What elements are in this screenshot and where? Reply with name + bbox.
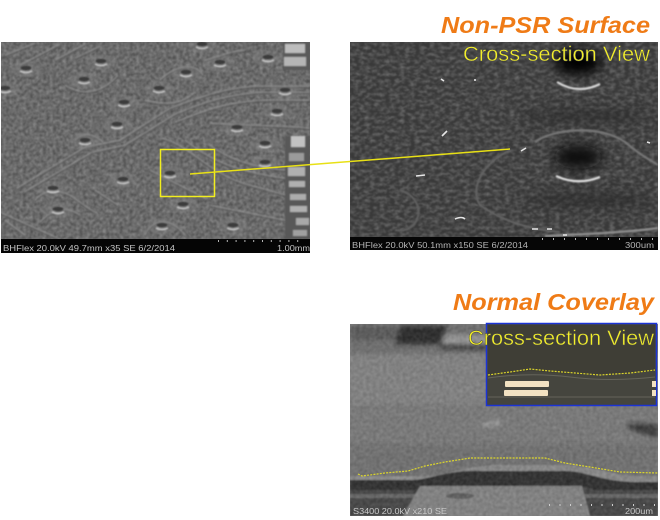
coverlay outline, dotted [358, 458, 658, 476]
scale bar caption [1, 239, 310, 253]
scale bar caption: BHFlex 20.0kV 49.7mm x35 SE 6/2/2014 [3, 243, 175, 253]
scale bar caption: 300um [625, 241, 654, 250]
scale caption: S3400 20.0kV x210 SE [353, 507, 448, 516]
layered tonal bands [350, 324, 658, 476]
scale bar caption: BHFlex 20.0kV 50.1mm x150 SE 6/2/2014 [352, 241, 529, 250]
substrate ridge at bottom [350, 465, 658, 516]
inset dark upper layer [488, 325, 655, 375]
panel: surface overview micrograph [0, 37, 310, 253]
label: cross-section view, coverlay: Cross-section View [468, 327, 655, 350]
panel: coverlay section micrograph [350, 324, 658, 516]
inset copper traces [504, 381, 656, 396]
label: cross-section view, surface: Cross-section View [463, 43, 651, 66]
heading: Normal Coverlay: Normal Coverlay [453, 289, 655, 315]
inset lower layer [488, 371, 655, 404]
debris specks [416, 79, 650, 235]
heading: Non-PSR Surface: Non-PSR Surface [441, 12, 650, 38]
panel: surface magnified micrograph [350, 42, 658, 250]
callout box on overview [160, 150, 214, 196]
scale caption [353, 505, 655, 516]
scale bar caption: 1.00mm [277, 243, 310, 253]
dimple shadows and rims [395, 49, 658, 236]
circuit traces on the surface [0, 43, 310, 241]
scale caption: 200um [625, 507, 653, 516]
arrow: connector line to magnified view [190, 149, 510, 174]
scale bar caption [350, 237, 658, 250]
inset film lines [488, 375, 655, 397]
inset coverlay outline, dotted [488, 369, 655, 375]
inset: optical cross-section [486, 324, 656, 406]
dimples [0, 37, 300, 234]
connector pads [283, 42, 310, 239]
